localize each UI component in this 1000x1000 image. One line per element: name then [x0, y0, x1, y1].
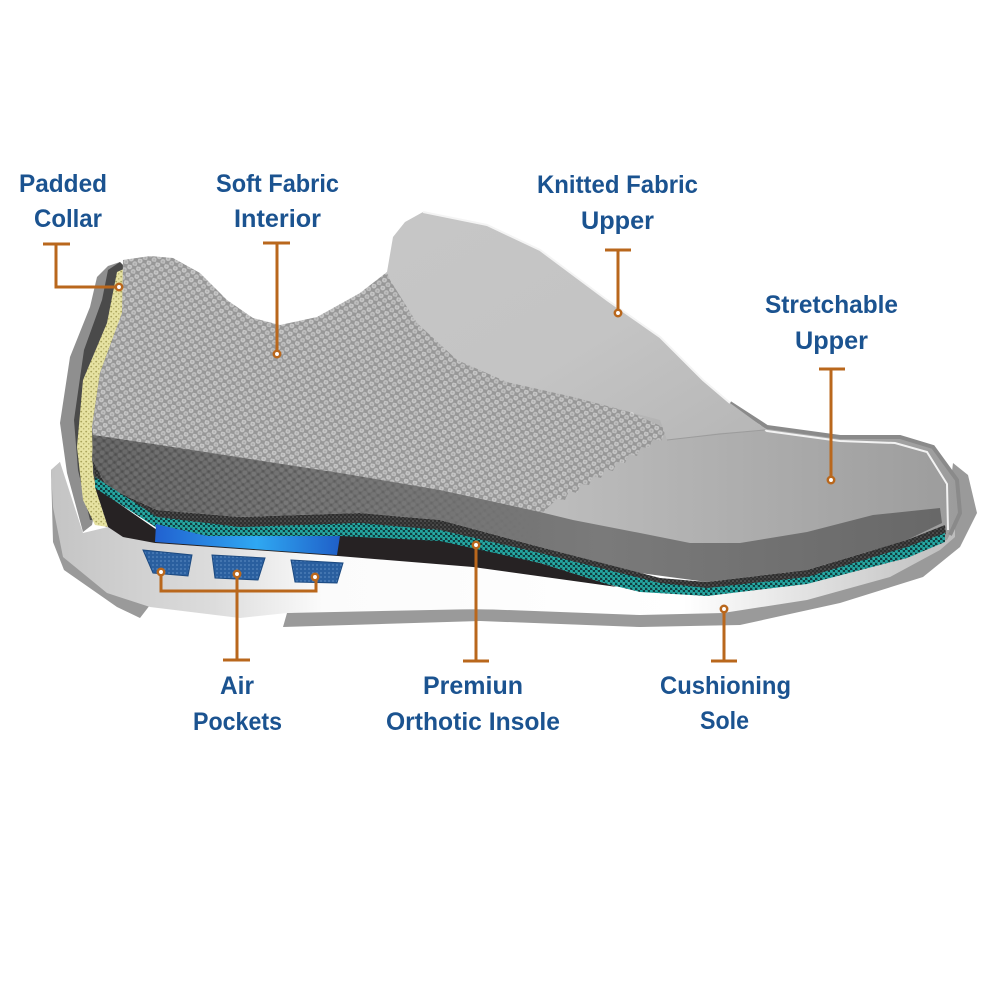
toe upper	[500, 400, 961, 560]
pocket 2	[212, 555, 265, 580]
label	[19, 170, 107, 233]
toe rim	[730, 403, 960, 535]
speckled insole layer	[92, 460, 946, 590]
collar dark strip	[74, 262, 126, 520]
marker	[274, 351, 280, 357]
label	[386, 672, 560, 736]
label: Sole	[700, 707, 749, 735]
callout: air pockets	[158, 569, 318, 736]
leader line	[711, 612, 737, 661]
leader line	[161, 575, 316, 660]
label	[765, 291, 898, 355]
marker	[116, 284, 122, 290]
leader line	[43, 244, 118, 287]
label: Interior	[234, 205, 321, 233]
pocket 1	[143, 550, 192, 576]
pocket 3	[291, 560, 343, 583]
callout: premium orthotic insole	[386, 542, 560, 736]
label	[193, 672, 282, 736]
label: Padded	[19, 170, 107, 198]
blue gel heel pad	[155, 524, 340, 555]
label	[660, 672, 791, 735]
label	[537, 171, 698, 235]
label: Upper	[795, 327, 868, 355]
label: Premiun	[423, 672, 523, 700]
leader line	[605, 250, 631, 310]
label: Collar	[34, 205, 102, 233]
infographic: shoe cross-section	[20, 174, 977, 730]
marker	[615, 310, 621, 316]
label: Orthotic Insole	[386, 708, 560, 736]
label	[216, 170, 339, 233]
callout: padded collar	[19, 170, 122, 290]
air pockets	[143, 550, 343, 583]
label: Upper	[581, 207, 654, 235]
label: Pockets	[193, 708, 282, 736]
insole foam top	[92, 435, 942, 582]
knitted mesh interior	[92, 256, 665, 515]
collar outer band	[60, 262, 126, 532]
label: Stretchable	[765, 291, 898, 319]
knitted fabric tongue	[387, 212, 767, 440]
black midsole	[95, 487, 617, 587]
insole mesh texture	[92, 435, 416, 517]
marker	[721, 606, 727, 612]
tongue edge highlight	[423, 212, 730, 403]
marker	[473, 542, 479, 548]
leader line	[263, 243, 290, 351]
sole shadow	[51, 462, 977, 627]
label: Soft Fabric	[216, 170, 339, 198]
cushioning sole	[51, 462, 955, 618]
leader line	[463, 548, 489, 661]
callout: cushioning sole	[660, 606, 791, 735]
markers	[158, 569, 318, 580]
callout: soft fabric interior	[216, 170, 339, 357]
marker	[828, 477, 834, 483]
shoe illustration	[51, 212, 977, 627]
teal orthotic insole	[95, 477, 945, 596]
label: Air	[220, 672, 254, 700]
callout: stretchable upper	[765, 291, 898, 483]
toe rim highlight	[733, 410, 948, 530]
padded collar foam	[77, 268, 126, 527]
callout: knitted fabric upper	[537, 171, 698, 316]
leader line	[819, 369, 845, 477]
label: Cushioning	[660, 672, 791, 700]
label: Knitted Fabric	[537, 171, 698, 199]
toe crease	[667, 430, 765, 440]
